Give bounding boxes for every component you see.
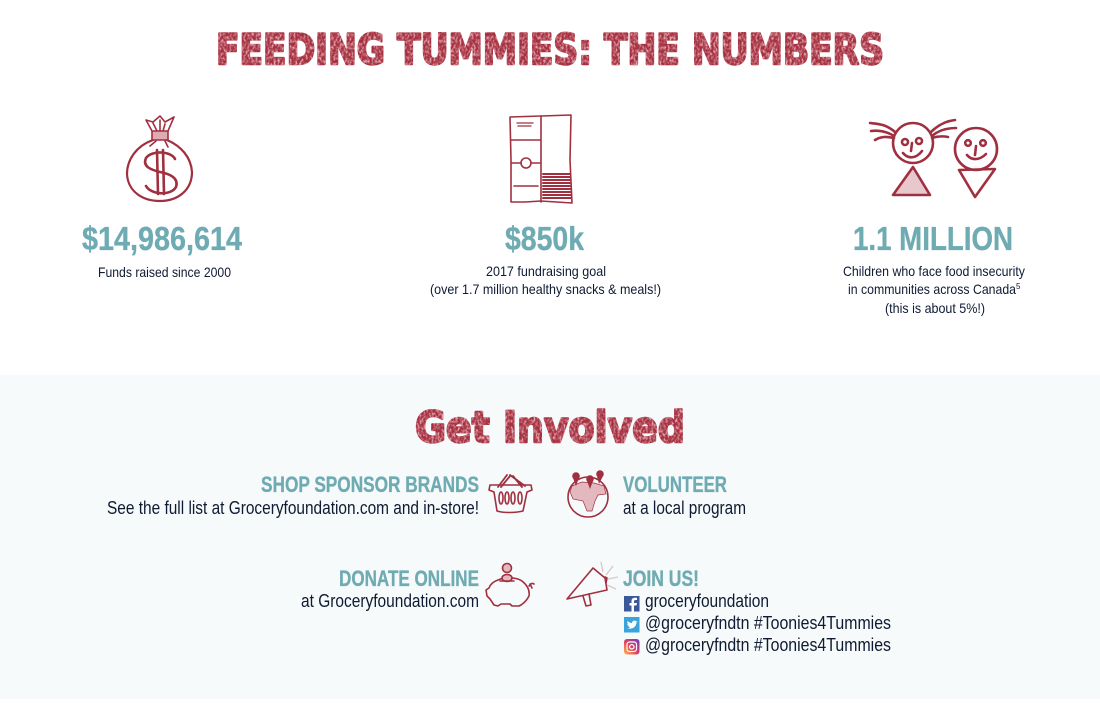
panel: get involved background — [0, 375, 1100, 699]
title: FEEDING TUMMIES: THE NUMBERS — [216, 25, 884, 74]
icon: instagram — [624, 639, 640, 654]
text: donate online: at Groceryfoundation.com — [301, 591, 479, 611]
panel: food insecurity — [843, 120, 1025, 316]
icon: money bag — [127, 116, 192, 201]
caption: children: in communities across Canada — [848, 281, 1016, 297]
icon: megaphone — [567, 562, 618, 606]
heading: donate online: DONATE ONLINE — [339, 566, 479, 591]
stat: fundraising goal: $850k — [505, 220, 585, 257]
icon: piggy bank — [486, 564, 534, 606]
row: instagram — [624, 635, 891, 655]
panel: funds raised — [82, 116, 243, 280]
icon: twitter — [624, 617, 640, 632]
caption: funds raised: Funds raised since 2000 — [98, 264, 231, 280]
row: twitter — [624, 613, 891, 633]
text: volunteer: at a local program — [623, 498, 746, 518]
icon: two children — [870, 120, 997, 197]
icon: facebook — [624, 596, 640, 612]
block: shop sponsor brands — [107, 472, 532, 518]
row: facebook — [624, 591, 769, 612]
text: facebook handle: groceryfoundation — [645, 591, 769, 611]
icon: globe with pins — [568, 470, 608, 517]
heading: get involved: Get Involved — [415, 403, 685, 453]
block: join us — [567, 562, 891, 655]
block: donate online — [301, 564, 534, 611]
icon: snack box — [510, 115, 572, 203]
caption: children: 5 — [1016, 282, 1021, 291]
panel: fundraising goal — [430, 115, 661, 297]
heading: shop sponsor brands: SHOP SPONSOR BRANDS — [261, 472, 479, 497]
text: instagram handle: @groceryfndtn #Toonies4Tummies — [645, 635, 891, 655]
heading: join us: JOIN US! — [623, 566, 699, 591]
caption: children: Children who face food insecurity — [843, 263, 1025, 279]
heading: volunteer: VOLUNTEER — [623, 472, 727, 497]
stat: funds raised: $14,986,614 — [82, 220, 243, 257]
caption: children — [843, 263, 1025, 316]
caption: fundraising goal: 2017 fundraising goal — [486, 263, 606, 279]
text: shop sponsor brands: See the full list at Groceryfoundation.com and in-store! — [107, 498, 479, 518]
stat: children: 1.1 MILLION — [853, 220, 1013, 257]
text: twitter handle: @groceryfndtn #Toonies4Tummies — [645, 613, 891, 633]
icon: basket — [489, 475, 532, 512]
caption: fundraising goal: (over 1.7 million healthy snacks & meals!) — [430, 281, 661, 297]
caption: fundraising goal — [430, 263, 661, 297]
caption: children: (this is about 5%!) — [885, 300, 985, 316]
block: volunteer — [568, 470, 746, 518]
